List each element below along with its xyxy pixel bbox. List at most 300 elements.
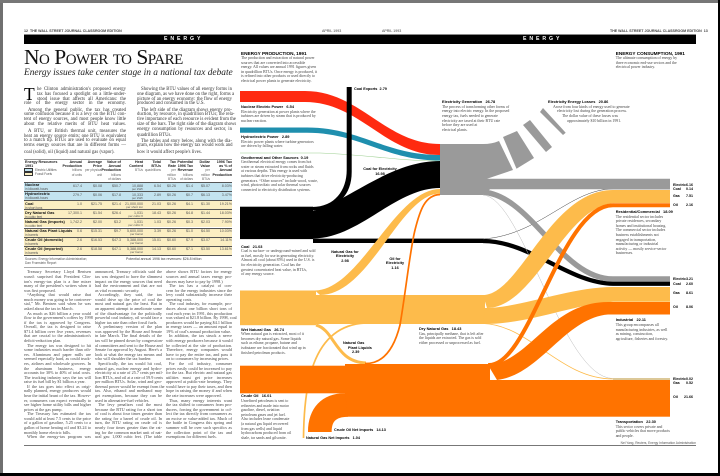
- article column 2: of coal is about four times greater than: [95, 411, 162, 416]
- row: crude oil imported: $18.58: [91, 247, 102, 251]
- row: coal: Coal: [25, 201, 33, 206]
- column headers: Total: [152, 160, 161, 164]
- label: coal: Coal is surface- or underground-mined and sold: [241, 249, 315, 253]
- row: natural gas imports: 1,031: [134, 220, 143, 224]
- article column 2: look at what the energy tax means and: [95, 352, 162, 357]
- row: natural gas plant liquids: $9.7: [114, 229, 121, 233]
- row: crude oil imported: Crude Oil (imported): [25, 246, 63, 251]
- row: hydroelectric: 279.7: [73, 193, 82, 197]
- intro column 2: size of the bars. The right side of the diagram shows: [137, 122, 236, 127]
- row: natural gas imports: $0.3: [186, 220, 193, 224]
- article column 1: seemed especially hard, as could truck-: [24, 356, 91, 361]
- heading: energy consumption: electrical power industry.: [616, 65, 655, 69]
- label: dry natural gas: Dry Natural Gas 18.43: [419, 326, 461, 331]
- row: coal: 1.0: [77, 202, 82, 206]
- flow: crude oil (orange): [240, 194, 670, 432]
- sector values: transportation: Gas: [673, 381, 680, 385]
- page frame: left edge: [0, 0, 2, 476]
- article column 3: 19% of coal's annual production value.: [166, 329, 231, 334]
- row: crude oil imported: in barrels: [25, 251, 38, 255]
- label: crude oil: [241, 393, 292, 440]
- article column 3: In addition, the tax struck a nerve: [169, 333, 232, 338]
- row: hydroelectric: 3.47%: [222, 193, 232, 197]
- row: crude oil domestic: $7.9: [186, 238, 193, 242]
- label: geothermal: turbines that drive electricity-producing: [241, 174, 303, 178]
- article column 3: ducers, forcing the government to col-: [166, 407, 232, 412]
- article column 1: gallon of home heating oil and $3.24 to: [24, 425, 91, 430]
- label: crude oil: Unrefined petroleum is sent to: [241, 399, 288, 403]
- row: natural gas plant liquids: per barrel: [130, 232, 143, 236]
- row: nuclear: 10,888: [132, 184, 143, 188]
- row: crude oil domestic: $3.07: [201, 238, 210, 242]
- row: hydroelectric: [24, 191, 232, 200]
- column headers: Content: [129, 164, 143, 168]
- intro column 1: terms energy sources that are in different forms —: [24, 143, 126, 148]
- sector values: transportation: 0.52: [686, 381, 693, 385]
- article column 1: was first proposed.: [24, 288, 56, 293]
- row: coal: $21.4: [112, 202, 121, 206]
- article column 2: because the BTU rating for a short ton: [95, 407, 162, 412]
- column headers: Price: [93, 164, 102, 168]
- sector values: industrial: [673, 277, 693, 309]
- section band: [24, 35, 696, 44]
- label: residential commercial: businesses.: [616, 251, 633, 255]
- label: electricity generation: [442, 99, 510, 132]
- label: dry natural gas: [419, 326, 484, 345]
- article column 1: $71.4 billion over five years, revenues: [24, 329, 91, 334]
- article column 3: in energy taxes — an amount equal to: [166, 324, 232, 329]
- label: industrial: This group encompasses all: [616, 323, 659, 327]
- flow: natural gas (yellow): [240, 189, 670, 438]
- row: coal: $21.75: [91, 202, 102, 206]
- label: transportation: Transportation 22.30: [616, 419, 656, 424]
- column headers: Annual: [108, 164, 121, 168]
- row: coal: [24, 200, 232, 209]
- row: crude oil domestic: 5,388,000: [127, 238, 143, 242]
- article column 2: al committees and sent to the House and: [95, 343, 163, 348]
- label: residential commercial: business establishments not: [616, 233, 659, 237]
- label: natural gas for electricity: 2.98: [341, 259, 349, 263]
- sector values: industrial: Electric: [673, 277, 686, 281]
- label: oil for electricity: 1.16: [391, 266, 399, 270]
- label: crude oil: petroleum gases and jet fuel.: [241, 413, 286, 417]
- heading: energy production: energy. All values are annual 1991 figures given: [241, 65, 316, 69]
- label: dry natural gas: Gas, principally methane, that is left after: [419, 332, 484, 336]
- label: residential commercial: engaged in transportation,: [616, 238, 656, 242]
- heading: energy production: The production and extraction of natural power: [241, 56, 315, 60]
- article column 1: “Anything that would raise that: [27, 292, 91, 297]
- label: nuclear: nuclear reaction.: [241, 119, 267, 123]
- table sources: Sources: Energy Information Administration;: [25, 257, 87, 261]
- intro column 2: energy consumption by resources and sector, in: [137, 127, 232, 132]
- article column 2: in late March. The final details of the: [95, 333, 162, 338]
- heading: energy consumption: ENERGY CONSUMPTION, 1991: [616, 51, 685, 56]
- row: dry natural gas: $1.44: [201, 211, 210, 215]
- row: nuclear: $50.7: [112, 184, 121, 188]
- label: transportation: public vehicles that move products: [616, 429, 670, 433]
- article column 2: impact on the energy sources that need: [95, 279, 162, 284]
- intro column 2: quadrillion BTUs.: [137, 133, 172, 138]
- article column 3: [166, 269, 237, 439]
- sector values: industrial: Oil: [673, 305, 678, 309]
- intro column 2: tive importance of each resource is evident from the: [137, 117, 236, 122]
- label: oil for electricity: Oil for: [389, 257, 401, 261]
- column headers: Average: [88, 160, 102, 164]
- label: geothermal: Geothermal and Other Sources 0.19: [241, 155, 308, 160]
- article column 2: of the disadvantage for the politically: [95, 311, 162, 316]
- row: nuclear: per kWh: [132, 187, 143, 191]
- energy resources table: [24, 160, 232, 265]
- row: hydroelectric: $6.13: [201, 193, 210, 197]
- drop cap: T: [24, 84, 35, 104]
- article column 3: ducers may have to pay by 1998.): [166, 279, 223, 284]
- article column 3: operating costs.: [166, 297, 192, 302]
- column headers: billions: [183, 173, 193, 177]
- article column 3: above shows BTU factors for energy: [166, 269, 232, 274]
- label: crude oil: shale, tar sands and gilsonite.: [241, 436, 287, 440]
- sector values: industrial: 2.60: [686, 282, 693, 286]
- row: dry natural gas: 18.43: [152, 211, 161, 215]
- article column 2: electricity at a rate of 25.7 cents per mil-: [95, 370, 163, 375]
- intro column 2: The tables and story below, along with the dia-: [141, 139, 232, 144]
- label: coal: Coal 21.03: [241, 244, 262, 249]
- label: transportation: [616, 419, 670, 438]
- table heading: 1991: [25, 164, 33, 168]
- column headers: Heat: [135, 160, 143, 164]
- sector values: residential: 0.14: [686, 187, 693, 191]
- article column 1: nally planned, energy producers would: [24, 388, 91, 393]
- row: crude oil imported: 13.61%: [220, 247, 232, 251]
- article column 3: cern for the energy industries since the: [166, 288, 232, 293]
- row: nuclear: $0.26: [167, 184, 176, 188]
- article column 3: Thus, many energy interests want: [169, 398, 232, 403]
- subtitle: Energy issues take center stage in a national tax debate: [24, 68, 233, 78]
- label: electricity energy losses: electricity lost during the generation process.: [557, 109, 627, 113]
- row: hydroelectric: 10,333: [132, 193, 143, 197]
- intro column 2: produced and consumed in the U.S.: [137, 101, 205, 106]
- label: industrial: manufacturing industries, as well: [616, 328, 667, 332]
- row: natural gas imports: $2.03: [201, 220, 210, 224]
- row: hydroelectric: $17.8: [112, 193, 121, 197]
- intro column 1: some confusion because it is a levy on the BTU con-: [24, 112, 126, 117]
- column headers: Tax: [170, 160, 176, 164]
- article column 3: be collected at the site of production.: [166, 343, 232, 348]
- article column 2: The levy penalizes coal the most: [98, 402, 162, 407]
- row: crude oil domestic: per barrel: [130, 241, 143, 245]
- label: wet natural gas: such as ethane, propane, butane and: [241, 341, 297, 345]
- intro column 2: how it would affect people's lives.: [137, 150, 202, 155]
- article column 3: summer will be over such specifics as: [166, 425, 232, 430]
- article column 1: deficit-reduction plan.: [24, 338, 61, 343]
- article column 1: The energy tax was designed to hit: [27, 343, 91, 348]
- article column 2: used in alternative-fuel vehicles.: [95, 398, 149, 403]
- row: hydroelectric: $0.26: [167, 193, 176, 197]
- intro column 1: heat an energy source emits; one BTU is equivalent: [24, 134, 126, 139]
- row: crude oil domestic: $47.3: [112, 238, 121, 242]
- label: hydroelectric: Electric power plants where turbine generators: [241, 140, 314, 144]
- table sources: [25, 257, 87, 265]
- article column 2: higher tax rate than other fossil fuels.: [95, 320, 157, 325]
- table legend: Electric Utilities: [35, 168, 57, 172]
- label: residential commercial: The commercial sector includes: [616, 228, 665, 232]
- column headers: as % of: [219, 164, 232, 168]
- article column 3: the battle in Congress this spring and: [166, 420, 232, 425]
- label: industrial: Industrial 22.11: [616, 317, 646, 322]
- row: dry natural gas: $1.54: [93, 211, 102, 215]
- label: natural gas net imports: Natural Gas Net Imports 1.04: [306, 436, 360, 440]
- heading: energy production: in quadrillion BTUs. Once energy is produced, it: [241, 70, 317, 74]
- label: crude oil: hydrocarbons produced from oil: [241, 431, 291, 435]
- label: coal: as fuel, mostly for use in generating electricity.: [241, 254, 314, 258]
- article column 1: many of the president's writers when it: [24, 283, 91, 288]
- section label left: ENERGY: [164, 36, 203, 42]
- column headers: billions: [72, 168, 82, 172]
- article column 2: thermal power would be exempt from the: [95, 384, 165, 389]
- label: crude oil: (a natural gas liquid recovered: [241, 422, 288, 426]
- article column 1: Overall, the tax is designed to raise: [24, 324, 91, 329]
- label: geothermal: [241, 155, 318, 192]
- article column 2: per million BTUs. Solar, wind and geo-: [95, 379, 162, 384]
- column headers: of dollars: [180, 177, 193, 181]
- row: nuclear: in kilowatt-hours: [25, 187, 48, 191]
- article column 3: have to pay the entire tax, and pass it: [166, 352, 232, 357]
- rule under intro: [24, 158, 232, 161]
- row: coal: $1.30: [201, 202, 210, 206]
- row: nuclear: 617.4: [73, 184, 82, 188]
- row: natural gas imports: per cubic ft: [128, 223, 143, 227]
- label: nuclear: Nuclear Electric Power 6.54: [241, 104, 294, 109]
- row: nuclear: $0.08: [93, 184, 102, 188]
- row: natural gas imports: 1,742.2: [70, 220, 82, 224]
- row: dry natural gas: $0.26: [167, 211, 176, 215]
- row: natural gas imports: $3.2: [114, 220, 121, 224]
- row: coal: 19.21%: [220, 202, 232, 206]
- column headers: Potential: [177, 160, 193, 164]
- article column 1: bear the initial brunt of the tax. Howev-: [24, 393, 91, 398]
- article column 1: As much as $26 billion a year could: [27, 311, 91, 316]
- article column 1: of a gallon of gasoline, 5.25 cents to a: [24, 420, 91, 425]
- sector values: industrial: Gas: [673, 291, 680, 295]
- column headers: Production: [102, 168, 121, 172]
- article column 2: ing for the common market unit of nat-: [95, 430, 162, 435]
- article column 1: the aluminum business, energy: [24, 366, 91, 371]
- row: crude oil domestic: $0.60: [167, 238, 176, 242]
- intro column 1: to a match tip. BTUs are used to evaluate on equal: [24, 138, 126, 143]
- flow: nuclear (red): [240, 91, 440, 155]
- article column 1: The trucking industry says the tax will: [24, 375, 91, 380]
- article column 2: who will shoulder the tax burden:: [95, 356, 151, 361]
- row: crude oil imported: $7.1: [186, 247, 193, 251]
- column headers: Value: [200, 164, 210, 168]
- row: crude oil imported: $3.50: [201, 247, 210, 251]
- label: wet natural gas: Wet Natural Gas 26.74: [241, 327, 284, 332]
- label: wet natural gas: finished petroleum products.: [241, 351, 286, 355]
- label: crude oil net imports: Crude Oil Net Imports 14.13: [334, 428, 386, 432]
- label: geothermal: at various depths. This energy is used with: [241, 169, 307, 173]
- article column 3: utilities must get price increases: [166, 375, 232, 380]
- row: hydroelectric: 2.89: [154, 193, 161, 197]
- article column 1: if the tax is approved by Congress.: [24, 320, 91, 325]
- row: crude oil imported: per barrel: [130, 250, 143, 254]
- article column 2: natural gas, nuclear energy and hydro-: [95, 366, 162, 371]
- row: crude oil domestic: Crude Oil (domestic): [25, 237, 63, 242]
- article column 3: exemptions for different fuels.: [166, 434, 217, 439]
- label: coal: of any energy source.: [241, 272, 274, 276]
- running header date left: APRIL 1993: [322, 29, 341, 33]
- row: crude oil imported: 2.6: [77, 247, 82, 251]
- label: coal for electricity: Coal for Electricity: [363, 167, 397, 171]
- row: nuclear: 6.54: [154, 184, 161, 188]
- article column 3: levy could substantially increase their: [166, 292, 232, 297]
- article column 1: prices at the gas pump.: [24, 407, 62, 412]
- article column 3: coal each year; in 1991, this production: [166, 311, 232, 316]
- label: natural gas for electricity: [331, 250, 359, 263]
- label: residential commercial: homes and institutional housing.: [616, 224, 666, 228]
- column headers: 1996 Tax: [217, 160, 232, 164]
- column headers: of dollars: [108, 177, 121, 181]
- row: natural gas imports: 1.03: [154, 220, 161, 224]
- sector values: industrial: 3.21: [686, 277, 693, 281]
- label: hydroelectric: are driven by falling water.: [241, 144, 283, 148]
- article column 2: the rating for a barrel of crude oil. In: [95, 416, 162, 421]
- article column 3: hope in raising the money if and when: [166, 388, 232, 393]
- label: geothermal: generators. “Other sources” include wood, waste,: [241, 179, 318, 183]
- article column 3: the rate increases were approved.: [166, 393, 222, 398]
- label: coal: [241, 244, 316, 276]
- column headers: quadrillions: [145, 168, 161, 172]
- label: electricity generation: before they are used at: [442, 123, 477, 127]
- transportation electric and gas strip: [613, 378, 670, 380]
- column headers: BTUs: [151, 164, 161, 168]
- row: coal: 21,000,000: [125, 202, 143, 206]
- flow: coal (black): [240, 87, 670, 284]
- article column 1: If the tax goes into effect as origi-: [27, 384, 91, 389]
- sector values: transportation: [673, 377, 693, 399]
- article column 1: ers. Aluminum and paper mills are: [24, 352, 91, 357]
- article column 3: prices easily could be increased to pay: [166, 366, 232, 371]
- article column 2: turn, the BTU rating on crude oil is: [95, 420, 162, 425]
- row: hydroelectric: $0.06: [93, 193, 102, 197]
- row: crude oil imported: $0.60: [167, 247, 176, 251]
- row: crude oil domestic: in barrels: [25, 242, 38, 246]
- label: coal for electricity: 16.98: [375, 172, 385, 176]
- row: natural gas plant liquids: in barrels: [25, 233, 38, 237]
- table legend: [24, 168, 57, 176]
- intro column 2: The left side of the diagram shows energy pro-: [141, 108, 232, 113]
- row: coal: in short tons: [25, 206, 42, 210]
- label: electricity energy losses: The dollar value of these losses was: [562, 114, 618, 118]
- label: electricity generation: energy into electric energy. In the proposed: [442, 109, 509, 113]
- article column 3: sources and annual taxes energy pro-: [166, 274, 232, 279]
- label: geothermal: Geothermal electrical energy comes from hot: [241, 160, 311, 164]
- label: natural gas plant liquids: Plant Liquids: [348, 346, 372, 350]
- article column 2: lion BTUs, and oil at a rate of 59.9 cents: [95, 375, 163, 380]
- running header date right: APRIL 1993: [382, 29, 401, 33]
- article column 2: tax will be pinned down by congression-: [95, 338, 163, 343]
- article column 2: A preliminary version of the plan: [98, 324, 162, 329]
- intro column 2: one diagram, as we have done on the right, forms a: [137, 92, 234, 97]
- label: coal for electricity: [363, 167, 397, 176]
- label: hydroelectric: Hydroelectric Power 2.89: [241, 134, 289, 139]
- row: natural gas plant liquids: $4.50: [201, 229, 210, 233]
- running header right: THE WALL STREET JOURNAL CLASSROOM EDITION 13: [610, 29, 708, 33]
- label: residential commercial: private residences, secondary: [616, 219, 661, 223]
- label: transportation: and people.: [616, 434, 634, 438]
- table heading: Energy Resources: [25, 160, 57, 164]
- heading: energy consumption: three economic end-use sectors and the: [616, 61, 677, 65]
- row: natural gas plant liquids: 0.6: [77, 229, 82, 233]
- electricity generation block and losses (grey): [440, 108, 670, 378]
- label: wet natural gas: isobutane are fractionated that wind up in: [241, 346, 306, 350]
- article column 2: most and natural gas the least. But in: [95, 301, 162, 306]
- article column 1: The Treasury has estimated the tax: [27, 411, 91, 416]
- label: residential commercial: Residential/Commercial 18.09: [616, 209, 673, 214]
- column headers: Value of: [107, 160, 121, 164]
- article column 2: had the environment and that are not: [95, 283, 162, 288]
- intro column 1: [24, 86, 126, 155]
- column headers: 1996 Tax: [178, 164, 193, 168]
- column headers: unit: [97, 173, 102, 177]
- row: nuclear: $1.4: [186, 184, 193, 188]
- sector values: residential: Oil: [673, 203, 678, 207]
- sector values: transportation: 21.66: [684, 395, 693, 399]
- row: crude oil domestic: 2.6: [77, 238, 82, 242]
- article column 2: tax. Also, ethanol and methanol may: [95, 388, 162, 393]
- row: crude oil imported: 14.13: [152, 247, 161, 251]
- label: residential commercial: [616, 209, 673, 255]
- intro column 1: stood issue that affects all Americans: the: [37, 97, 126, 102]
- label: coal exports: Coal Exports 2.79: [354, 87, 387, 91]
- flow: geothermal and other (green): [240, 153, 440, 161]
- label: crude oil: gasoline, diesel, aviation: [241, 408, 279, 412]
- article column 1: raise its fuel bill by $1 billion a year.: [24, 379, 86, 384]
- label: electricity energy losses: [548, 99, 630, 123]
- row: crude oil domestic: 15.01: [152, 238, 161, 242]
- article column 1: sial,” Mr. Bentsen said when he was: [24, 301, 91, 306]
- intro column 2: duction, by resource, in quadrillion BTUs; the rela-: [137, 112, 234, 117]
- row: natural gas plant liquids: 3.39: [154, 229, 161, 233]
- sector values: transportation: Electric: [673, 377, 686, 381]
- bottom rule: [24, 444, 696, 446]
- heading: energy consumption: The ultimate consumption of energy by: [616, 56, 677, 60]
- table total: Potential annual 1996 tax revenues: $26.8 billion: [126, 257, 202, 261]
- label: geothermal: connected to electricity distribution systems.: [241, 188, 310, 192]
- intro column 2: [137, 86, 236, 155]
- column headers: Revenue: [178, 168, 193, 172]
- section band rule: [24, 34, 696, 35]
- article column 3: would have to pay their taxes, and then: [166, 384, 232, 389]
- article column 1: some industries much harder than oth-: [24, 347, 91, 352]
- table bottom rule: [24, 254, 232, 256]
- page frame: bottom edge: [0, 473, 720, 476]
- row: crude oil imported: [24, 246, 232, 255]
- article column 2: Accordingly, they said, the tax: [98, 292, 162, 297]
- article column 2: announced, Treasury officials said the: [95, 269, 162, 274]
- article column 3: for the tax. But electric and natural gas: [166, 370, 232, 375]
- column headers: BTUs: [202, 177, 210, 181]
- row: crude oil domestic: $16.53: [91, 238, 102, 242]
- label: coal: greatest concentrated heat value, in BTUs,: [241, 268, 307, 272]
- label: coal: Almost all coal (about 85%) used in the U.S. is: [241, 258, 314, 262]
- article column 1: ers, airlines and wholesale growers. In: [24, 361, 91, 366]
- intro column 2: Showing the BTU values of all energy forms in: [141, 87, 232, 92]
- source credit: Nel Yang, Reuters, Energy Information Administration: [621, 441, 696, 445]
- row: hydroelectric: Hydroelectric: [25, 191, 50, 196]
- article column 1: er, consumers can expect eventually to: [24, 398, 91, 403]
- row: dry natural gas: per cubic ft: [128, 214, 143, 218]
- article column 1: Treasury Secretary Lloyd Bentsen: [27, 269, 91, 274]
- label: natural gas for electricity: Natural Gas for: [331, 250, 359, 254]
